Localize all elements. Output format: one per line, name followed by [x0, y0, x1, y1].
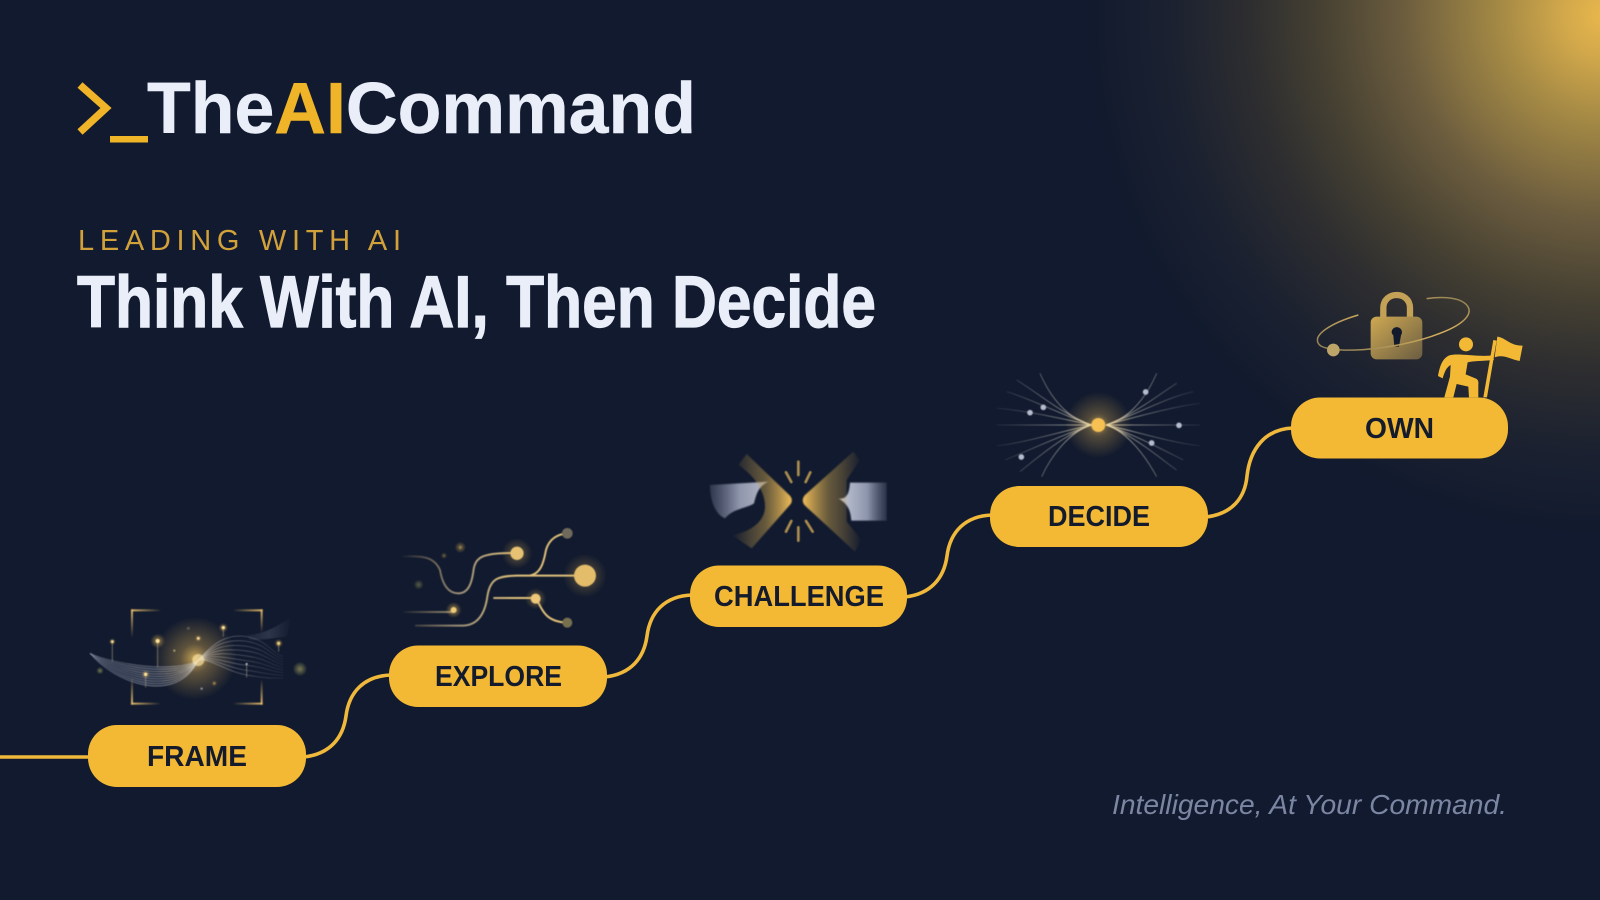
- frame corner brackets: [131, 609, 263, 705]
- icon: explore circuit: [400, 528, 607, 628]
- main title: Think With AI, Then Decide: [77, 262, 876, 343]
- pill: DECIDE: [990, 486, 1208, 547]
- pill: EXPLORE: EXPLORE: [435, 661, 562, 693]
- connector path: [0, 428, 1293, 757]
- pill: DECIDE: DECIDE: [1048, 501, 1150, 533]
- wordmark text: TheAICommand: [147, 69, 696, 149]
- pill: FRAME: FRAME: [147, 741, 247, 773]
- icon: terminal prompt: [80, 85, 148, 142]
- pill: CHALLENGE: [690, 566, 907, 627]
- icon: padlock orbit: [1317, 295, 1469, 359]
- icon: challenge clash: [710, 452, 887, 552]
- pill: OWN: OWN: [1365, 413, 1434, 445]
- pill: CHALLENGE: CHALLENGE: [714, 581, 884, 613]
- pill: EXPLORE: [389, 646, 607, 707]
- pill: FRAME: [88, 725, 306, 787]
- icon: frame wave: [90, 609, 307, 705]
- eyebrow: LEADING WITH AI: [78, 225, 401, 257]
- corner sun glow: [1000, 0, 1600, 640]
- tagline: Intelligence, At Your Command.: [1112, 789, 1507, 820]
- icon: climber with flag: [1438, 337, 1523, 397]
- pill: OWN: [1291, 398, 1508, 458]
- logo wordmark: [80, 69, 696, 149]
- icon: decide fan: [997, 373, 1200, 477]
